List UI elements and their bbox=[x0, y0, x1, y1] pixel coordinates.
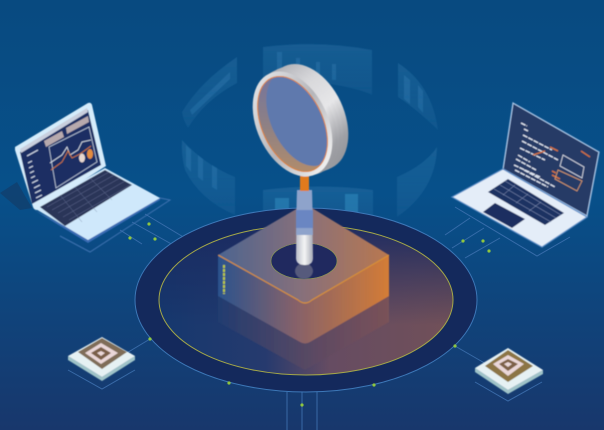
cube top face bbox=[218, 206, 389, 303]
dashboard sidebar bbox=[27, 150, 42, 198]
dashboard donut charts bbox=[79, 149, 93, 162]
left laptop base bbox=[34, 168, 160, 240]
network lines and platforms bbox=[68, 207, 570, 430]
left chip bbox=[68, 337, 135, 381]
right chip top bbox=[485, 350, 533, 382]
left laptop bbox=[15, 103, 170, 252]
right chip bbox=[475, 348, 543, 394]
cube ghost reflection bbox=[218, 290, 389, 370]
dashboard frame bbox=[49, 127, 97, 188]
right laptop trackpad bbox=[483, 203, 525, 228]
left laptop screen frame bbox=[15, 103, 106, 210]
left chip square inner bbox=[91, 347, 111, 360]
left laptop keyboard bbox=[40, 170, 132, 226]
right laptop key rows bbox=[494, 181, 561, 222]
right laptop bbox=[452, 103, 599, 247]
left chip square outer bbox=[85, 343, 118, 364]
right chip square outer bbox=[493, 355, 524, 376]
lens rim depth bbox=[241, 51, 364, 188]
cube top edge highlight bbox=[218, 255, 389, 303]
right laptop code text block bbox=[514, 123, 558, 187]
left chip top bbox=[78, 338, 127, 369]
holographic ring of data panels bbox=[182, 44, 438, 228]
right laptop chart panels bbox=[555, 155, 584, 191]
network nodes bbox=[128, 222, 491, 407]
handle reflection bbox=[295, 263, 313, 279]
outer platform disc bbox=[135, 208, 477, 392]
left chip edge bbox=[68, 356, 135, 381]
hole in cube bbox=[271, 243, 337, 279]
left laptop display bbox=[20, 110, 101, 204]
handle shaft bbox=[296, 190, 313, 265]
right chip edge bbox=[475, 368, 543, 394]
left laptop base edge bbox=[34, 198, 160, 243]
handle collar bbox=[296, 210, 313, 228]
left chip center bbox=[97, 351, 105, 356]
lens front rim bbox=[237, 59, 348, 189]
dashboard header tabs bbox=[44, 116, 89, 147]
right laptop screen bbox=[503, 103, 599, 216]
dashboard line white bbox=[50, 140, 91, 163]
left laptop title bar bbox=[20, 108, 88, 153]
handle blue sleeve bbox=[296, 190, 313, 235]
lens inner orange ring bbox=[243, 65, 342, 183]
ghost panels bbox=[182, 44, 438, 225]
left laptop shadow bbox=[0, 182, 32, 210]
left chip base bbox=[68, 337, 135, 377]
right chip base bbox=[475, 348, 543, 390]
ghost bottom bars bbox=[275, 194, 358, 228]
right laptop keyboard bbox=[488, 179, 564, 225]
right chip center bbox=[504, 362, 512, 367]
inner glowing disc bbox=[159, 225, 453, 375]
left laptop platform bbox=[60, 198, 170, 252]
cube front faces bbox=[218, 255, 389, 344]
glass cube base bbox=[218, 206, 389, 370]
keyboard key rows bbox=[47, 172, 130, 222]
lens inner wall and glass bbox=[258, 76, 328, 172]
magnifying glass bbox=[252, 63, 349, 280]
right laptop orange code marks bbox=[533, 147, 590, 179]
left laptop dashboard chart bbox=[49, 127, 97, 188]
right laptop base bbox=[452, 169, 587, 247]
ghost panel bars bbox=[186, 52, 423, 190]
cube side label marks bbox=[223, 265, 225, 294]
orange connector bbox=[300, 176, 309, 191]
right chip square inner bbox=[499, 359, 518, 371]
dashboard line orange bbox=[51, 146, 91, 170]
